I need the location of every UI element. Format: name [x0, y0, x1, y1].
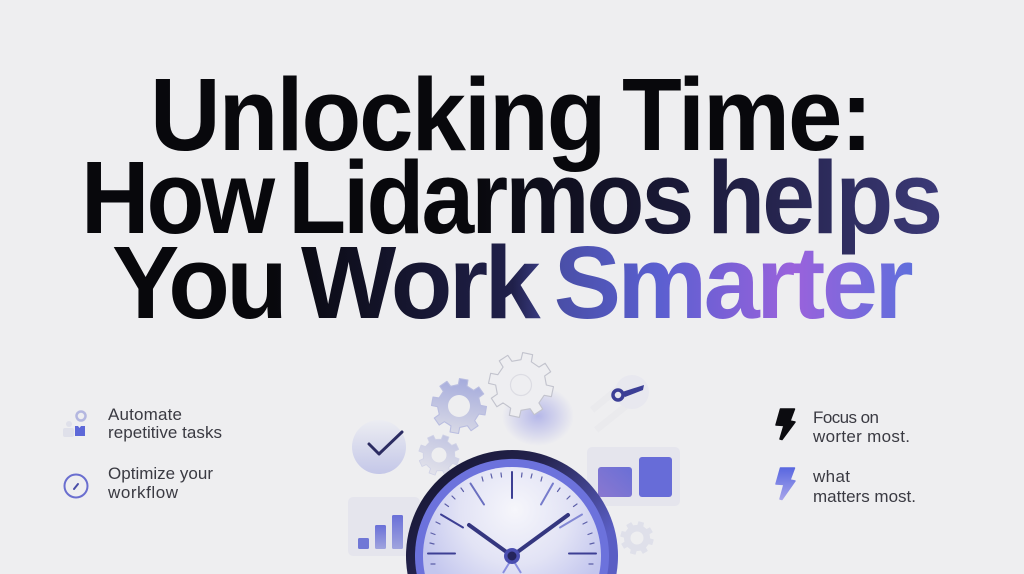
gear: small right — [617, 518, 657, 558]
text: optimize your workflow — [107, 464, 213, 502]
text: what matters most — [812, 467, 916, 506]
icon: gauge — [64, 474, 88, 498]
title: How Lidarmos helps — [81, 139, 943, 255]
icon: blue bolt — [776, 468, 795, 500]
clock face — [423, 467, 601, 574]
panel: bar chart — [348, 497, 420, 556]
text: what matters most: what — [812, 467, 850, 486]
clock hands — [469, 515, 568, 556]
gear: small left — [413, 429, 465, 481]
text: automate repetitive tasks: repetitive tasks — [108, 423, 222, 442]
glow — [502, 386, 574, 446]
text: focus on: Focus on — [813, 408, 879, 427]
panel: square bars — [587, 447, 680, 506]
icon: key — [592, 375, 649, 430]
icon: check badge — [352, 420, 406, 474]
clock rim — [406, 450, 618, 574]
title — [81, 58, 943, 340]
text: optimize your workflow: Optimize your — [108, 464, 213, 483]
lower light hands — [503, 560, 521, 573]
text: optimize your workflow: workflow — [107, 483, 179, 502]
icon: black bolt — [776, 409, 795, 440]
text: automate repetitive tasks — [108, 405, 222, 442]
major ticks — [428, 472, 596, 554]
gear: medium filled — [428, 375, 490, 437]
gear: outlined large — [483, 347, 559, 423]
feature list: right — [776, 408, 916, 506]
feature list: left — [63, 405, 222, 502]
illustration: clock and productivity icons — [348, 347, 680, 574]
clock — [406, 450, 618, 574]
title: Unlocking Time: — [150, 58, 873, 173]
icon: automation — [63, 412, 86, 437]
text: focus on — [812, 408, 910, 446]
minor ticks — [430, 473, 594, 564]
text: what matters most: matters most. — [813, 487, 916, 506]
text: automate repetitive tasks: Automate — [108, 405, 182, 424]
text: focus on: worter most. — [812, 427, 910, 446]
center hub — [504, 548, 520, 564]
title: You Work Smarter — [112, 225, 914, 340]
